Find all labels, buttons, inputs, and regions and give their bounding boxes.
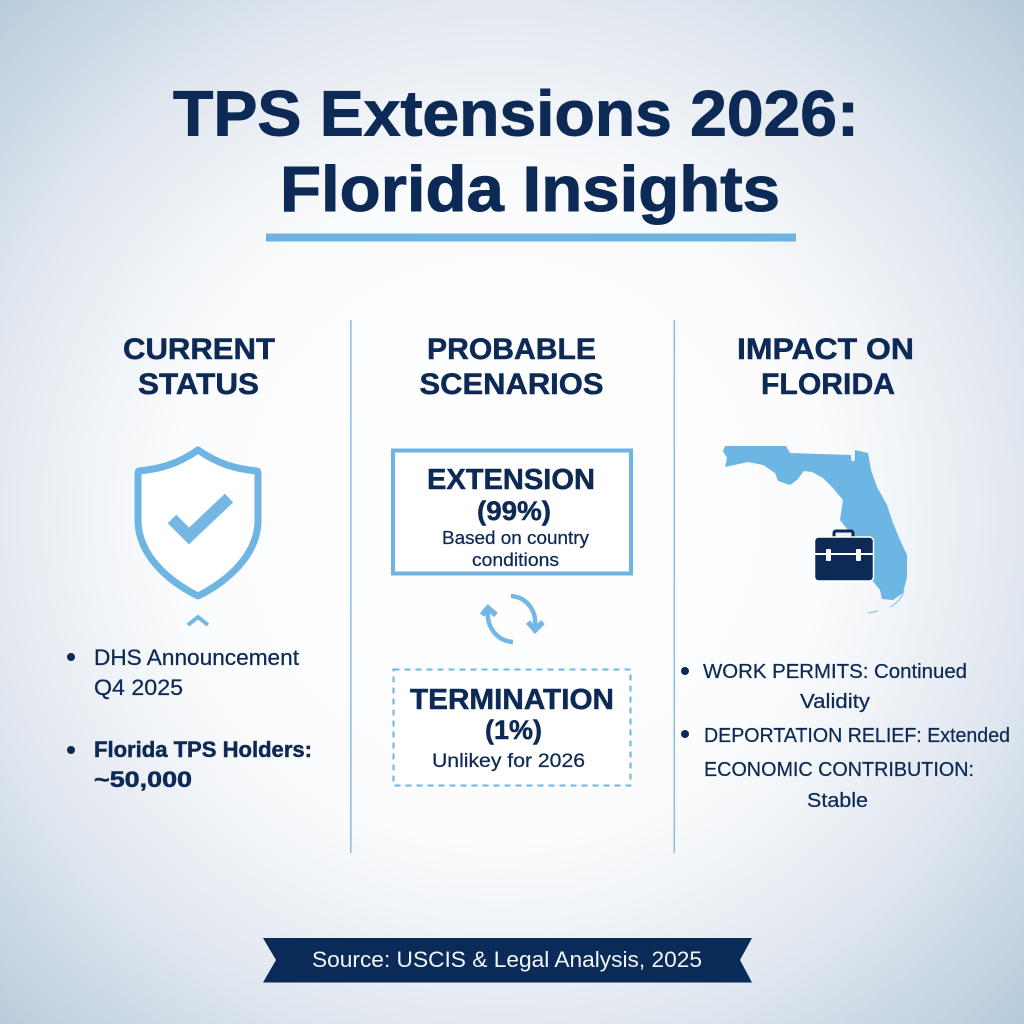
heading: impact on florida: IMPACT ON (737, 333, 914, 366)
heading: probable scenarios: SCENARIOS (420, 368, 604, 401)
title: Florida Insights (280, 153, 780, 225)
icon: briefcase (814, 531, 874, 581)
heading: impact on florida (737, 333, 914, 401)
bullet list: impacts: Stable (807, 790, 868, 812)
heading: current status: STATUS (138, 368, 259, 401)
card: extension: EXTENSION (427, 464, 595, 496)
card: extension (393, 450, 631, 574)
panel: impact on florida (681, 333, 1010, 812)
bullet list: status facts: DHS Announcement (94, 645, 299, 670)
card: termination: Unlikey for 2026 (432, 751, 585, 772)
source ribbon: Source: USCIS & Legal Analysis, 2025 (312, 947, 702, 972)
panel: current status (67, 333, 312, 792)
bullet list: status facts: Q4 2025 (94, 675, 183, 700)
icon: shield with check (138, 450, 258, 596)
title: TPS Extensions 2026: (173, 78, 859, 150)
card: extension: conditions (472, 550, 559, 570)
title underline (266, 234, 796, 242)
card: termination: TERMINATION (410, 684, 614, 716)
title (173, 78, 859, 225)
bullet list: status facts: ~50,000 (94, 767, 192, 792)
heading: probable scenarios (420, 333, 604, 401)
heading: probable scenarios: PROBABLE (427, 333, 596, 366)
icon: cycle arrows (482, 596, 543, 642)
card: extension: (99%) (477, 496, 551, 526)
card: termination: (1%) (485, 715, 542, 745)
source ribbon (263, 938, 752, 982)
panel: probable scenarios (393, 333, 631, 786)
bullet list: impacts: Validity (800, 691, 870, 713)
bullet list: status facts: Florida TPS Holders: (94, 737, 312, 762)
bullet list: status facts (67, 645, 312, 792)
bullet list: impacts: WORK PERMITS: Continued (703, 661, 967, 683)
card: extension: Based on country (442, 528, 589, 548)
heading: current status (123, 333, 275, 401)
bullet list: impacts: ECONOMIC CONTRIBUTION: (704, 759, 974, 781)
map: florida (723, 446, 907, 600)
bullet list: impacts: DEPORTATION RELIEF: Extended (704, 725, 1010, 747)
heading: current status: CURRENT (123, 333, 275, 366)
bullet list: impacts (681, 661, 1010, 812)
heading: impact on florida: FLORIDA (761, 368, 895, 401)
icon: florida keys (868, 591, 904, 613)
icon: small chevron (188, 617, 208, 625)
card: termination (394, 670, 630, 786)
